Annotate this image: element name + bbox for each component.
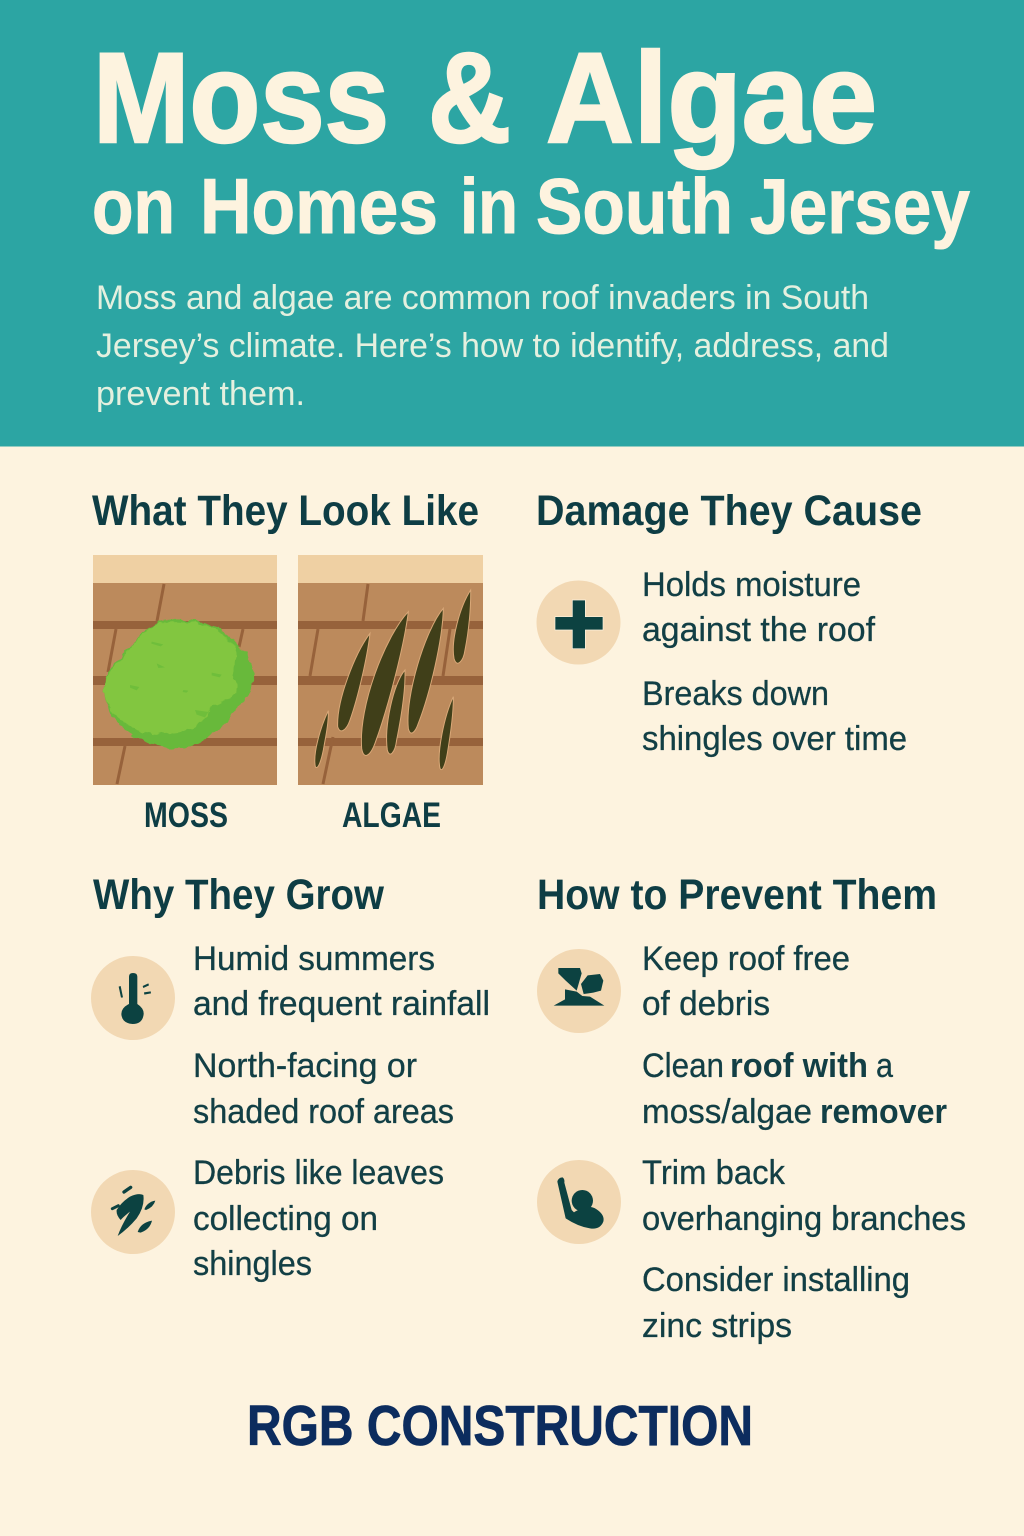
title: on [92,162,175,250]
moss clump [104,619,253,748]
text: why they grow, list 1: Humid summers [193,940,435,978]
title: in [460,162,518,250]
title: South [536,162,733,250]
text: damage list: Breaks down [642,675,829,713]
title: & [428,27,511,170]
heading: why they grow: Why They Grow [93,871,384,919]
title: Homes [200,162,438,250]
text: prevention list 1 [642,940,947,1131]
text: prevention list 2: Consider installing [642,1261,910,1299]
footer brand: RGB CONSTRUCTION [247,1394,753,1458]
text: prevention list 1: Clean [642,1047,724,1085]
algae streaks [315,590,471,770]
text: why they grow, list 1: shaded roof areas [193,1093,454,1131]
text: why they grow, list 2: shingles [193,1245,312,1283]
header banner [0,0,1024,446]
icon: debris [537,949,621,1033]
label: algae: ALGAE [342,796,441,835]
icon: leaves [91,1170,175,1254]
heading: damage they cause: Damage They Cause [536,487,922,535]
text: damage list [642,566,907,758]
text: why they grow, list 2 [193,1154,444,1283]
intro text: Jersey’s climate. Here’s how to identify, address, and [96,327,889,365]
intro text [96,279,889,413]
text: prevention list 1: Keep roof free [642,940,850,978]
text: damage list: shingles over time [642,720,907,758]
text: damage list: Holds moisture [642,566,861,604]
title: Moss [93,27,389,170]
text: why they grow, list 2: Debris like leaves [193,1154,444,1192]
label: moss: MOSS [144,796,228,835]
title: Jersey [750,162,970,250]
heading: how to prevent them: How to Prevent Them [537,871,937,919]
text: why they grow, list 1 [193,940,490,1131]
text: prevention list 2: Trim back [642,1154,786,1192]
panel: moss illustration [93,555,277,785]
icon: thermometer [91,956,175,1040]
heading: what they look like: What They Look Like [92,487,479,535]
text: prevention list 1: roof with [730,1047,868,1085]
title [92,27,970,250]
intro text: Moss and algae are common roof invaders in South [96,279,869,317]
text: why they grow, list 1: and frequent rainfall [193,985,490,1023]
text: prevention list 1: of debris [642,985,770,1023]
icon: trimmed branch [537,1160,621,1244]
text: prevention list 1: a [876,1047,893,1085]
text: prevention list 2 [642,1154,966,1345]
text: damage list: against the roof [642,611,876,649]
text: prevention list 2: zinc strips [642,1307,792,1345]
text: prevention list 1: moss/algae [642,1093,812,1131]
text: why they grow, list 2: collecting on [193,1200,378,1238]
icon: plus [536,580,620,664]
text: why they grow, list 1: North-facing or [193,1047,417,1085]
panel: algae illustration [298,555,483,785]
text: prevention list 2: overhanging branches [642,1200,966,1238]
text: prevention list 1: remover [820,1093,947,1131]
title: Algae [546,27,877,170]
intro text: prevent them. [96,375,305,413]
